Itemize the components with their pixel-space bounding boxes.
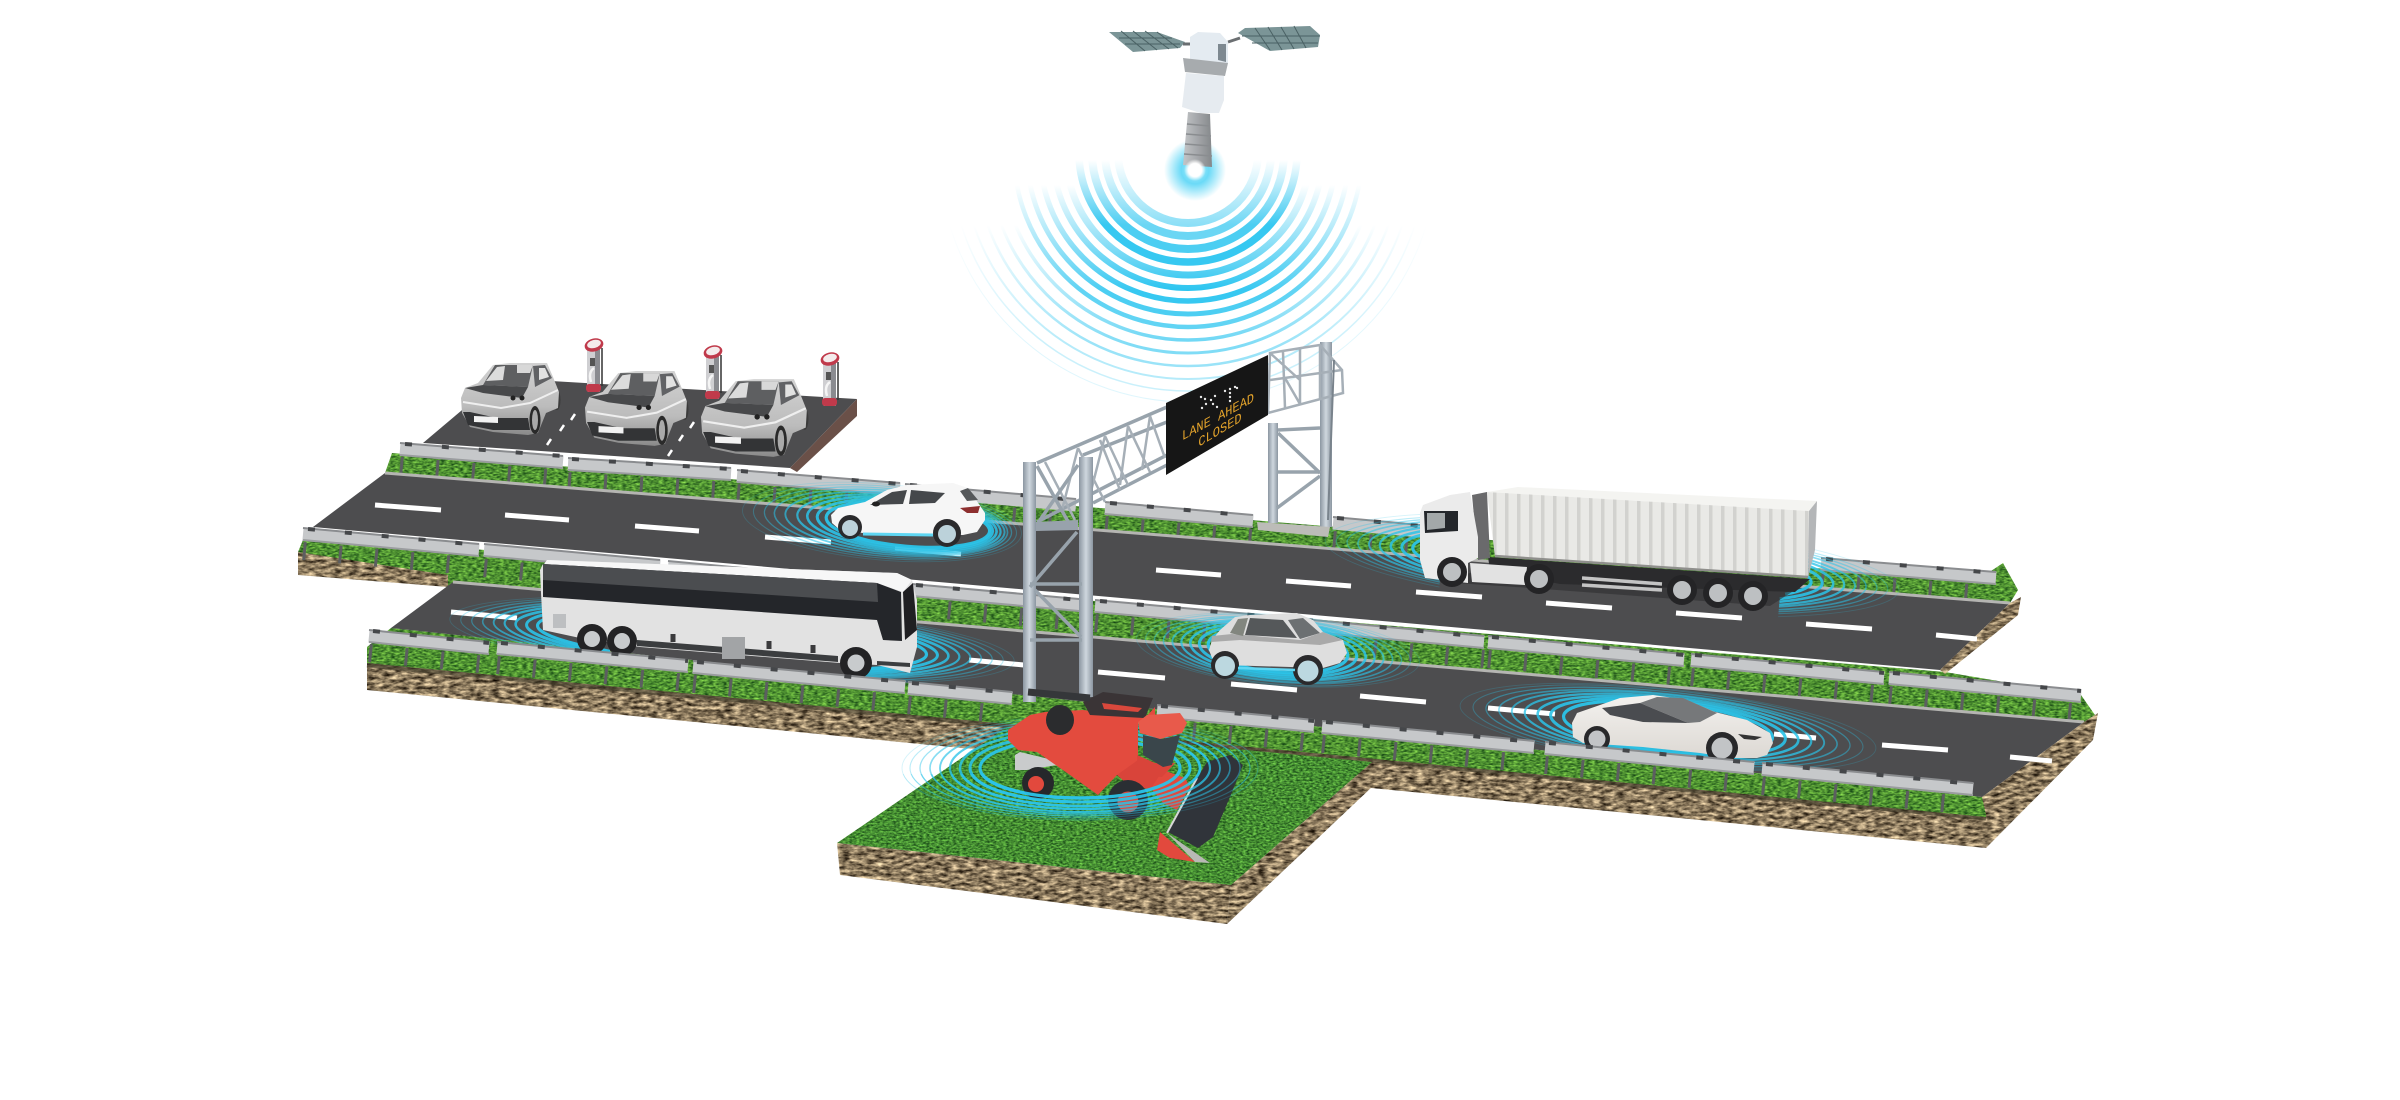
lower road soil [367, 663, 1986, 848]
bus front stripe [877, 661, 910, 667]
truck cab window interior [1427, 513, 1445, 530]
gantry right post [1079, 457, 1093, 697]
truck wheels [1437, 557, 1768, 611]
middle guardrail [303, 528, 2081, 713]
upper road surface [313, 473, 2010, 670]
solar panel arms [1183, 38, 1240, 44]
left solar panel [1109, 31, 1185, 52]
south guardrail [369, 630, 1973, 806]
small car wheels [1211, 651, 1323, 685]
harvester cab roof [1138, 713, 1187, 739]
bus wheels [577, 624, 872, 679]
parked car 3 [701, 379, 808, 457]
field side soil [1227, 762, 1372, 924]
lower road soil top shadow [367, 665, 1986, 818]
harvester header edge [1167, 778, 1197, 833]
satellite signal rings [939, 0, 1437, 402]
bus windshield [903, 583, 917, 640]
satellite neck [1183, 112, 1212, 167]
parked car 2 [585, 371, 688, 446]
harvester lower body fill [1117, 760, 1163, 790]
sign arrow symbols [1200, 386, 1238, 409]
hatchback mirror [872, 502, 880, 506]
harvester main body [1008, 707, 1155, 795]
harvester nose tip [1167, 833, 1210, 863]
bus rear markings [553, 614, 566, 628]
grass strip between roads [298, 535, 2095, 722]
parking bay markings [547, 414, 694, 456]
small car upper shade [1211, 632, 1343, 645]
truck side fairing [1470, 563, 1527, 585]
satellite [1109, 26, 1320, 201]
field grass [837, 727, 1372, 885]
parking lot soil edge [790, 399, 857, 472]
field front soil [837, 843, 1231, 924]
harvester header reel [1168, 755, 1243, 848]
lower road end soil [1982, 713, 2098, 848]
small car windshield [1288, 618, 1320, 639]
harvester rear step [1015, 752, 1057, 770]
gantry concrete base [1257, 522, 1330, 537]
bus lower stripe [637, 640, 838, 662]
bus body [540, 560, 917, 673]
truck chassis [1488, 557, 1810, 592]
sedan glass roof [1640, 697, 1717, 723]
small white car sensor rings [1133, 603, 1423, 697]
variable message sign [1166, 355, 1268, 475]
sedan side windows [1602, 703, 1688, 723]
harvester rings over the machine [902, 742, 1258, 820]
upper road kerb [385, 473, 2010, 603]
small car side window [1245, 618, 1297, 638]
satellite dark panel [1218, 44, 1226, 62]
harvester grain tank rim [1083, 692, 1153, 718]
lower road surface [391, 582, 2084, 797]
bus window upper tint [543, 564, 878, 602]
bus upper window band [543, 564, 902, 641]
gantry left post [1023, 462, 1036, 702]
hatchback rear window [960, 488, 978, 501]
trailer side [1487, 492, 1809, 578]
north verge grass [385, 453, 2018, 603]
upper road end soil [1940, 597, 2021, 674]
harvester spool [1046, 705, 1074, 735]
truck cab window frame [1424, 511, 1458, 533]
small car rear window [1230, 618, 1248, 636]
hatchback rear side window [909, 490, 945, 504]
white sedan [1572, 695, 1773, 764]
combine harvester [1008, 692, 1243, 863]
white sedan sensor rings [1456, 667, 1880, 787]
gantry right rear frame [1268, 342, 1343, 527]
gantry ladder [1328, 360, 1334, 520]
truck [1420, 487, 1817, 611]
harvester red nose [1157, 832, 1195, 862]
truck cab [1420, 492, 1478, 583]
truck sensor rings [1322, 503, 1902, 627]
satellite neck ribs [1184, 124, 1212, 156]
truck side steps [1582, 578, 1662, 590]
harvester sensor rings [902, 716, 1258, 820]
sedan headlight [1738, 734, 1762, 740]
parking lot [423, 378, 857, 472]
harvester rear wheel [1022, 767, 1054, 799]
harvester grain tank inner [1102, 703, 1142, 712]
charger: rear middle [702, 343, 724, 399]
upper road lane dashes [375, 505, 1977, 639]
charger: rear right [819, 350, 841, 406]
harvester auger [1028, 692, 1090, 698]
beam glow [1164, 139, 1226, 201]
charger: rear left [583, 336, 605, 392]
parked car 1 [461, 363, 560, 435]
hatchback under-glow [863, 534, 933, 535]
north guardrail [400, 443, 1996, 595]
coach bus [540, 560, 917, 679]
lower road south verge grass [367, 628, 1995, 817]
truck cab rear gap [1472, 492, 1490, 560]
truck road shadow [1440, 570, 1795, 606]
trailer top [1487, 487, 1817, 511]
sedan wheels [1584, 726, 1738, 764]
harvester feeder [1150, 770, 1190, 810]
gantry bracing [1030, 465, 1082, 640]
bus side hatches [673, 634, 813, 653]
beam core [1184, 159, 1206, 181]
small white car [1209, 613, 1347, 685]
upper road [313, 473, 2021, 674]
sign message second line: CLOSED [1198, 410, 1242, 452]
small car under-glow [1238, 668, 1295, 670]
white hatchback [831, 483, 985, 547]
harvester front wheel [1108, 780, 1148, 820]
bus roof [540, 560, 912, 592]
satellite grey ring [1183, 58, 1228, 76]
hatchback front window [870, 490, 907, 505]
trailer bottom rail [1495, 556, 1808, 577]
harvester front hub [1118, 792, 1138, 812]
upper road left soil [298, 552, 448, 587]
sign board [1166, 355, 1268, 475]
trailer rear end [1808, 501, 1817, 578]
lower road lane dashes [451, 612, 2052, 761]
sign message: LANE AHEAD [1182, 391, 1254, 446]
right solar panel [1238, 26, 1320, 51]
overhead gantry [1023, 342, 1343, 702]
hatchback tail light [960, 506, 980, 513]
gantry truss [1037, 407, 1167, 522]
lower road [391, 582, 2098, 848]
white hatchback sensor rings [739, 472, 1025, 572]
bus sensor rings [450, 598, 1014, 684]
gantry mounting plate [1036, 520, 1078, 531]
satellite upper body [1190, 32, 1228, 68]
harvester cab glass [1143, 735, 1180, 767]
satellite lower cylinder [1182, 73, 1224, 113]
field block [837, 727, 1372, 924]
harvester rear hub [1028, 776, 1044, 792]
lower road kerb [453, 582, 2084, 722]
hatchback wheels [838, 515, 961, 547]
harvester cab base [1137, 755, 1175, 777]
bus luggage grille [722, 637, 745, 659]
parking lot surface [423, 378, 857, 468]
